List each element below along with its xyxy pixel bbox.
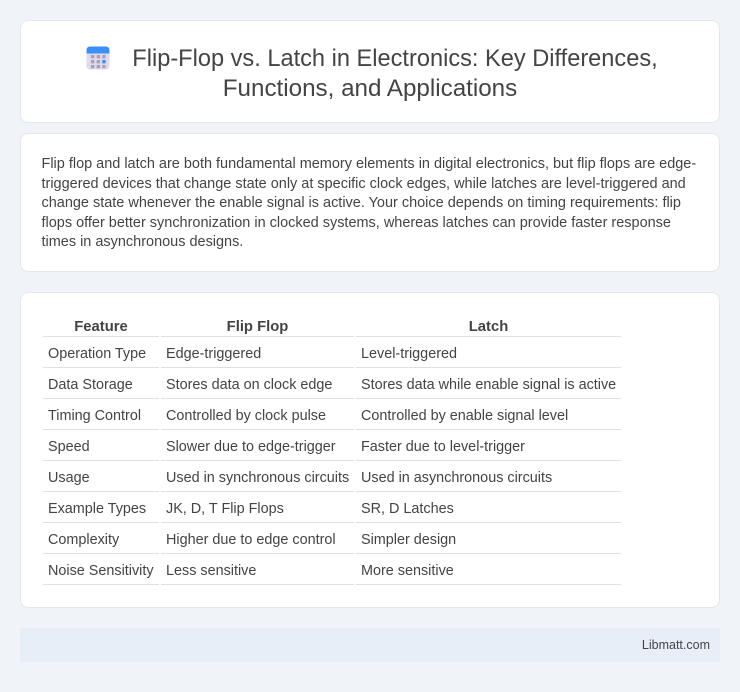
comparison table: Flip Flop bbox=[227, 319, 288, 335]
comparison table: Complexity bbox=[48, 532, 119, 548]
comparison table: Higher due to edge control bbox=[166, 532, 336, 548]
title bbox=[132, 46, 658, 102]
footer bar bbox=[20, 628, 720, 662]
comparison table: Stores data while enable signal is active bbox=[361, 377, 616, 393]
comparison table: Faster due to level-trigger bbox=[361, 439, 525, 455]
comparison table: Used in synchronous circuits bbox=[166, 470, 349, 486]
intro paragraph: times in asynchronous designs. bbox=[42, 234, 243, 250]
title: Flip-Flop vs. Latch in Electronics: Key Differences, bbox=[132, 46, 658, 72]
header panel bbox=[20, 20, 720, 123]
intro paragraph: change state whenever the enable signal is active. Your choice depends on timing requirements: flip bbox=[42, 195, 681, 211]
comparison table: SR, D Latches bbox=[361, 501, 454, 517]
comparison table: Noise Sensitivity bbox=[48, 563, 154, 579]
comparison table: Edge-triggered bbox=[166, 346, 261, 362]
comparison table: Simpler design bbox=[361, 532, 456, 548]
comparison table: Controlled by enable signal level bbox=[361, 408, 568, 424]
comparison table: More sensitive bbox=[361, 563, 454, 579]
comparison table: Feature bbox=[74, 319, 128, 335]
comparison table: Controlled by clock pulse bbox=[166, 408, 326, 424]
intro paragraph: Flip flop and latch are both fundamental memory elements in digital electronics, but flip flops are edge- bbox=[42, 156, 696, 172]
comparison table: Latch bbox=[469, 319, 508, 335]
comparison table bbox=[43, 319, 621, 585]
intro paragraph: flops offer better synchronization in clocked systems, whereas latches can provide faster response bbox=[42, 214, 671, 230]
comparison table: Data Storage bbox=[48, 377, 133, 393]
comparison table: Usage bbox=[48, 470, 90, 486]
comparison table: Level-triggered bbox=[361, 346, 457, 362]
intro paragraph bbox=[42, 156, 696, 250]
comparison table: Used in asynchronous circuits bbox=[361, 470, 552, 486]
title: Functions, and Applications bbox=[223, 75, 517, 102]
comparison table panel bbox=[20, 292, 720, 608]
footer text: Libmatt.com bbox=[642, 638, 710, 652]
comparison table: Operation Type bbox=[48, 346, 146, 362]
comparison table: Slower due to edge-trigger bbox=[166, 439, 336, 455]
intro text panel bbox=[20, 133, 720, 272]
comparison table: Example Types bbox=[48, 501, 146, 517]
comparison table: Timing Control bbox=[48, 408, 141, 424]
comparison table: Stores data on clock edge bbox=[166, 377, 332, 393]
intro paragraph: triggered devices that change state only at specific clock edges, while latches are level-triggered and bbox=[42, 176, 686, 192]
comparison table: Speed bbox=[48, 439, 90, 455]
comparison table: JK, D, T Flip Flops bbox=[166, 501, 284, 517]
comparison table: Less sensitive bbox=[166, 563, 256, 579]
icon: calendar bbox=[86, 46, 110, 70]
